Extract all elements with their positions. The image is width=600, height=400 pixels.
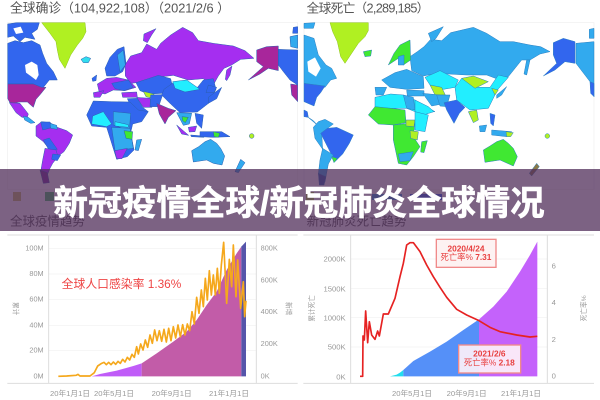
callout: peak death rate: 死亡率% 7.31 <box>441 252 492 262</box>
panel: death trend chart <box>303 213 594 398</box>
axis title: new cases: 新增 <box>285 302 294 316</box>
line: death rate <box>360 243 537 376</box>
x axis labels <box>392 388 541 398</box>
y axis labels: cumulative: 0M <box>33 371 44 380</box>
x axis labels: 21年1月1日 <box>209 388 249 398</box>
x axis labels <box>50 388 249 398</box>
panel: global deaths map <box>304 1 594 189</box>
panel: global trend chart <box>7 213 298 398</box>
y axis labels: death rate: 2 <box>552 335 556 344</box>
x axis labels: 20年5月1日 <box>94 388 134 398</box>
y axis labels: death rate <box>552 261 557 381</box>
heading: death trend: 新冠肺炎死亡趋势 <box>307 213 407 228</box>
y axis labels: daily new: 600K <box>261 275 278 284</box>
y axis labels: cumulative deaths <box>324 255 347 381</box>
y axis labels: daily new: 0K <box>261 371 270 380</box>
y axis labels: daily new: 200K <box>261 339 278 348</box>
y axis labels: death rate: 0 <box>552 372 556 381</box>
x axis labels: 20年9月1日 <box>447 388 487 398</box>
y axis labels: cumulative deaths: 500K <box>328 343 347 352</box>
title: 新冠疫情全球/新冠肺炎全球情况 <box>53 185 545 223</box>
y axis labels: daily new <box>261 244 278 380</box>
y axis labels: cumulative: 20M <box>29 346 44 355</box>
map legend swatches <box>13 192 442 201</box>
panel: global confirmed map <box>8 1 298 189</box>
axis title: death rate: 死亡率% <box>579 295 588 321</box>
callout: peak death rate: 2020/4/24 <box>447 243 485 253</box>
area: cumulative deaths <box>390 242 537 376</box>
x axis labels: 20年9月1日 <box>152 388 192 398</box>
y axis labels: cumulative: 60M <box>29 294 44 303</box>
x axis labels: 21年1月1日 <box>501 388 541 398</box>
annotation: infection rate: 全球人口感染率 1.36% <box>62 277 182 291</box>
y axis labels: cumulative deaths: 1000K <box>324 313 347 322</box>
world map: confirmed cases <box>8 23 298 183</box>
callout: current death rate: 2021/2/6 <box>473 349 506 359</box>
callout: current death rate: 死亡率% 2.18 <box>464 357 515 367</box>
heading: global trend: 全球疫情趋势 <box>10 213 85 228</box>
callout: peak death rate <box>436 239 496 267</box>
area: cumulative confirmed <box>92 242 246 376</box>
y axis labels: death rate: 6 <box>552 261 556 270</box>
y axis labels: cumulative: 40M <box>29 320 44 329</box>
y axis labels: cumulative deaths: 2000K <box>324 255 347 264</box>
y axis labels: daily new: 800K <box>261 244 278 253</box>
title band <box>0 169 600 231</box>
axis title: cumulative deaths: 累计死亡 <box>307 295 316 322</box>
axis title: cumulative: 累计 <box>11 302 20 316</box>
y axis labels: cumulative deaths: 1500K <box>324 284 347 293</box>
y axis labels: cumulative: 80M <box>29 269 44 278</box>
heading: global deaths: 全球死亡（2,289,185） <box>307 1 429 16</box>
y axis labels: cumulative: 100M <box>25 243 44 252</box>
y axis labels: daily new: 400K <box>261 307 278 316</box>
y axis labels: death rate: 4 <box>552 298 557 307</box>
x axis labels: 20年5月1日 <box>392 388 432 398</box>
x axis labels: 20年1月1日 <box>50 388 90 398</box>
world map: deaths <box>304 23 594 185</box>
line: daily new cases <box>58 242 246 376</box>
heading: global confirmed: 全球确诊（104,922,108）（2021/2/6 ） <box>10 1 230 16</box>
callout: current death rate <box>459 345 521 373</box>
y axis labels: cumulative deaths: 0K <box>336 372 347 381</box>
y axis labels: cumulative <box>25 243 44 380</box>
